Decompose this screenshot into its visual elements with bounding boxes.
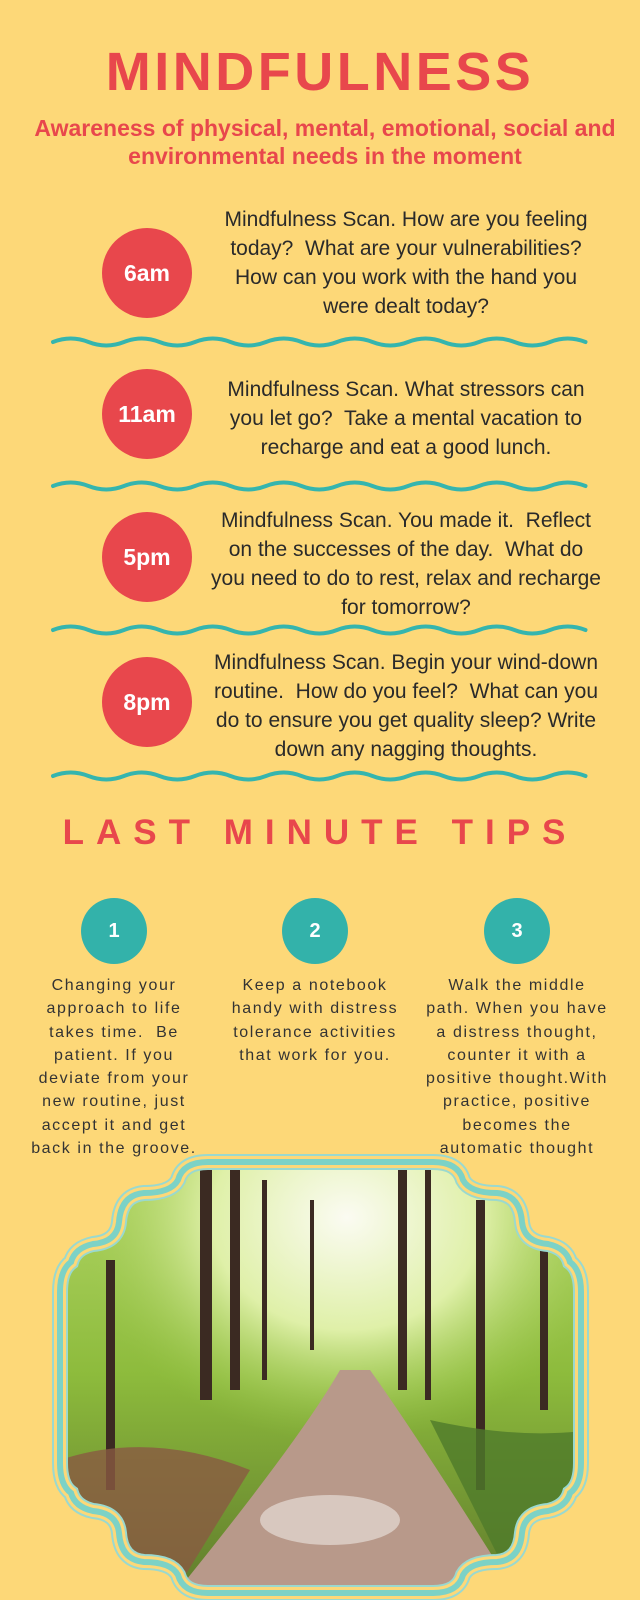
tip 1 text: back in the groove. [31,1140,197,1157]
time circle: 11am [102,369,192,459]
tip 1 text: approach to life [46,1000,182,1017]
text: 8pm: Mindfulness Scan. Begin your wind-down routine. How do you feel? What can you do to ensure you get quality sleep? Write down any nagging thoughts. [214,651,598,761]
tip 3 text: counter it with a [447,1047,587,1064]
tip 1 text [31,977,197,1157]
time circle: 5pm [102,512,192,602]
time circle: 8pm [102,657,192,747]
tip 3 text: path. When you have [426,1000,608,1017]
tips heading: LAST MINUTE TIPS [63,813,577,852]
subtitle: Awareness of physical, mental, emotional, social and environmental needs in the moment [34,115,616,169]
tip 3 text: practice, positive [443,1093,591,1110]
tip 3 circle [484,898,550,964]
tip 2 text [232,977,398,1064]
time circle: 6am [102,228,192,318]
tip 2 circle: 2 [309,920,321,942]
tip 3 text [426,977,608,1157]
tip 2 text: Keep a notebook [242,977,388,994]
text: 5pm: Mindfulness Scan. You made it. Reflect on the successes of the day. What do you need to do to rest, relax and recharge for tomorrow? [211,509,601,619]
title: MINDFULNESS [106,42,534,102]
tip 2 [232,898,398,1064]
text: 6am: Mindfulness Scan. How are you feeling today? What are your vulnerabilities? How can you work with the hand you were dealt today? [224,208,588,318]
tip 1 text: Changing your [52,977,176,994]
tip 1 text: takes time. Be [49,1024,179,1041]
time circle: 11am: 11am [118,400,176,426]
time circle: 8pm: 8pm [123,688,171,714]
text: 11am: Mindfulness Scan. What stressors can you let go? Take a mental vacation to recharge and eat a good lunch. [227,378,585,459]
tip 2 circle [282,898,348,964]
tip 2 text: that work for you. [239,1047,391,1064]
tip 2 text: tolerance activities [233,1024,397,1041]
tip 1 [31,898,197,1157]
tip 2 text: handy with distress [232,1000,398,1017]
tip 1 text: patient. If you [54,1047,174,1064]
tip 3 text: positive thought.With [426,1070,608,1087]
tip 3 text: a distress thought, [436,1024,598,1041]
time circle: 6am: 6am [124,260,170,286]
framed forest photo [52,1154,589,1600]
tip 3 text: becomes the [462,1117,572,1134]
tip 1 circle: 1 [108,920,120,942]
time circle: 5pm: 5pm [123,544,171,570]
tip 1 circle [81,898,147,964]
tip 1 text: new routine, just [42,1093,186,1110]
tip 1 text: accept it and get [42,1117,186,1134]
tip 3 [426,898,608,1157]
tip 3 text: automatic thought [440,1140,594,1157]
tip 3 text: Walk the middle [448,977,586,994]
tip 1 text: deviate from your [39,1070,189,1087]
tip 3 circle: 3 [511,920,523,942]
